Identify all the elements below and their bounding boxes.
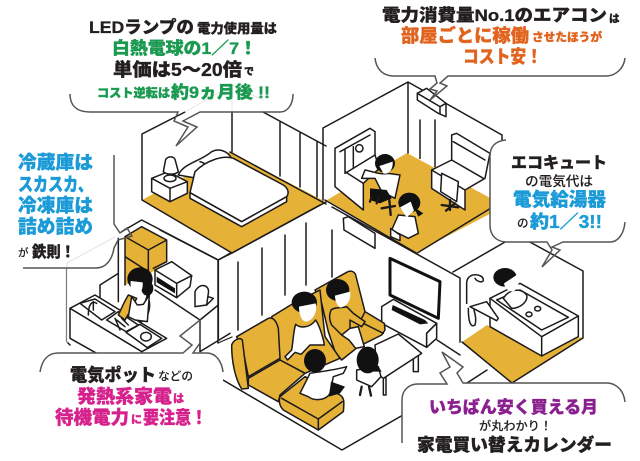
coffee table (375, 334, 422, 395)
bed (152, 150, 288, 227)
room: bathroom (462, 205, 583, 383)
text: refrigerator: 詰め詰め (18, 216, 93, 237)
text: LED: LEDランプの (89, 17, 194, 37)
speech bubble: EcoCute (490, 140, 625, 267)
text: electric pot: 要注意！ (143, 407, 207, 428)
electric pot (195, 285, 213, 307)
air conditioner (417, 88, 446, 117)
text: electric pot: に (131, 413, 142, 426)
text: air conditioner: は (609, 13, 620, 25)
sofa and family (232, 271, 385, 430)
text: EcoCute (511, 155, 607, 232)
text: buying calendar: が丸わかり！ (479, 418, 552, 433)
TV (382, 258, 440, 347)
text: buying calendar: いちばん安く買える月 (429, 397, 598, 417)
speech bubble: LED lamp (70, 17, 293, 146)
text: electric pot: などの (158, 370, 193, 383)
text: LED: 白熱電球の1／7！ (112, 38, 257, 58)
text: buying calendar: 家電買い替えカレンダー (417, 435, 612, 455)
illustration: isometric house cutaway (67, 82, 583, 450)
text: refrigerator: が (18, 246, 29, 259)
text: refrigerator: 冷蔵庫は (18, 152, 93, 173)
man in bath (503, 290, 527, 308)
text: air conditioner (382, 5, 620, 67)
counter (70, 295, 167, 352)
text: refrigerator: 冷凍庫は (18, 195, 93, 216)
speech bubble: electric pot (40, 320, 223, 440)
text: refrigerator (18, 152, 93, 261)
text: electric pot (55, 365, 207, 428)
shower (467, 275, 483, 326)
text: LED: 単価は5〜20倍 (113, 59, 242, 80)
refrigerator (125, 227, 167, 285)
text: LED: 電力使用量は (197, 21, 277, 36)
speech bubble: air conditioner (375, 5, 625, 100)
desks, shelves and kids (325, 120, 493, 253)
air conditioner lower (343, 217, 375, 248)
bathtub (490, 283, 578, 356)
text: electric pot: は (173, 392, 184, 405)
text: refrigerator: 鉄則！ (32, 242, 75, 261)
small girl (357, 367, 381, 387)
text: LED (89, 17, 277, 102)
faint lines seen through speech bubbles (67, 85, 467, 415)
child sitting (300, 367, 347, 400)
text: EcoCute: 約1／3!! (530, 211, 602, 232)
text: electric pot: 待機電力 (55, 407, 129, 428)
man (285, 320, 324, 360)
speech bubble: buying calendar (402, 352, 625, 461)
woman in apron (115, 267, 153, 330)
nightstand (152, 172, 187, 202)
woman in yellow (330, 307, 365, 335)
text: refrigerator: スカスカ、 (18, 174, 93, 195)
text: EcoCute: の (517, 218, 528, 230)
room: bedroom (142, 112, 326, 253)
text: EcoCute: の電気代は (525, 174, 593, 189)
room: kitchen (67, 220, 230, 353)
room: kids room (323, 82, 505, 253)
text: electric pot: 発熱系家電 (77, 386, 172, 407)
text: EcoCute: エコキュート (511, 155, 607, 172)
text: buying calendar (417, 397, 612, 455)
microwave (155, 262, 192, 298)
text: air conditioner: させたほうが (532, 30, 603, 44)
text: air conditioner: 部屋ごとに稼働 (401, 25, 529, 46)
text: air conditioner: 電力消費量No.1のエアコン (382, 5, 607, 25)
speech bubble: refrigerator (18, 152, 132, 268)
text: air conditioner: コスト安！ (463, 46, 542, 67)
text: LED: コスト逆転は (97, 85, 170, 100)
text: EcoCute: 電気給湯器 (513, 189, 606, 210)
room: living room (160, 205, 505, 450)
lamp (163, 157, 178, 174)
text: electric pot: 電気ポット (70, 365, 156, 385)
text: LED: 約9ヵ月後 !! (171, 82, 270, 102)
text: LED: で (244, 67, 254, 78)
